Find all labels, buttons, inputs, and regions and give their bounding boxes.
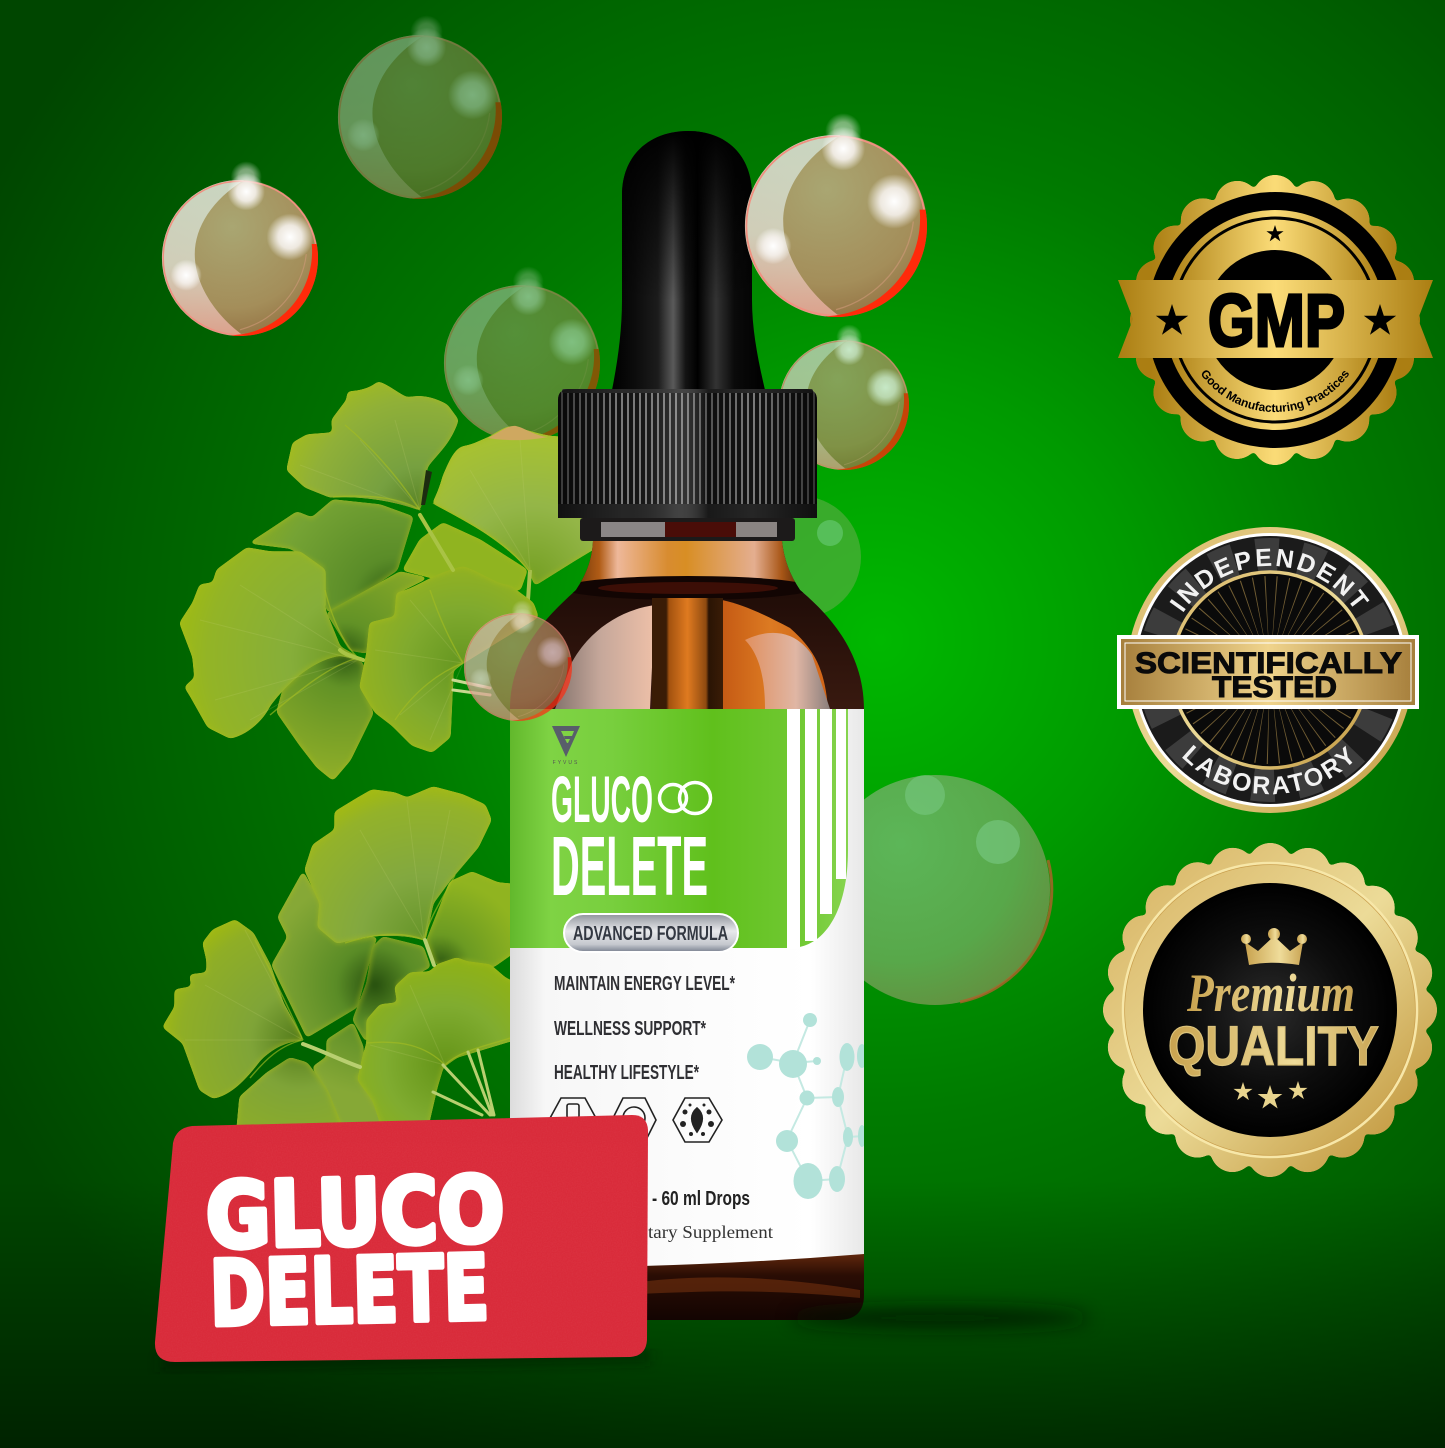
badge: GMP: Good Manufacturing Practices — [1202, 370, 1349, 412]
label molecule — [747, 1013, 867, 1199]
label stripes — [787, 709, 846, 949]
leaf edge ribs: upper cluster — [270, 425, 530, 720]
badge: premium quality — [1118, 858, 1422, 1162]
leaf: lower left — [163, 920, 303, 1098]
red card — [150, 1110, 655, 1372]
leaf: right — [433, 427, 600, 585]
leaf stem right — [528, 570, 530, 600]
bubble: small right — [779, 324, 909, 470]
arc text top — [1166, 566, 1374, 670]
leaf cluster: lower ginkgo — [163, 787, 520, 1130]
GMP ribbon stars — [1156, 304, 1188, 335]
GMP text: GMP — [1208, 279, 1345, 362]
bubble: large right green — [820, 775, 1052, 1005]
three stars — [1233, 1081, 1308, 1109]
badge: scientifically tested: LABORATORY — [1182, 744, 1352, 794]
label title — [552, 776, 712, 895]
advanced formula pill: ADVANCED FORMULA — [573, 923, 728, 945]
GMP top star — [1266, 225, 1284, 241]
leaf: front center — [360, 567, 538, 752]
product label — [510, 709, 867, 1268]
label benefits: MAINTAIN ENERGY LEVEL* — [554, 973, 735, 995]
card title: DELETE — [209, 1236, 490, 1347]
label logo: FYVUS — [553, 760, 579, 766]
banner text — [1135, 647, 1402, 704]
leaf: lower front — [358, 958, 520, 1130]
premium scalloped edge — [1118, 858, 1422, 1162]
leaf: big left — [180, 548, 363, 738]
leaf edge ribs: lower cluster — [250, 875, 510, 1078]
label benefits: WELLNESS SUPPORT* — [554, 1018, 706, 1040]
banner text: SCIENTIFICALLY — [1135, 647, 1402, 680]
leaf: top — [287, 382, 458, 510]
label benefits: HEALTHY LIFESTYLE* — [554, 1062, 699, 1084]
dropper bulb — [612, 131, 765, 390]
leaf: lower top — [305, 787, 491, 943]
ribbed cap — [558, 389, 817, 518]
badge: scientifically tested — [1117, 527, 1419, 813]
GMP arc text — [1183, 320, 1367, 412]
bottle — [500, 131, 880, 1322]
product label: DELETE — [551, 819, 708, 913]
dropper bulb top shade — [622, 131, 752, 300]
leaf stems: lower cluster — [303, 940, 494, 1115]
GMP ribbon — [1118, 280, 1433, 358]
leaf stems: upper cluster — [340, 515, 490, 695]
leaf: lower left back — [277, 655, 373, 780]
bottle ground shadow — [790, 1307, 1090, 1329]
leaf veins: upper cluster — [200, 420, 530, 740]
crown icon — [1241, 928, 1307, 965]
leaf: lower bottom mid — [313, 1023, 383, 1130]
banner text: TESTED — [1212, 671, 1337, 704]
card title: GLUCO — [205, 1158, 505, 1269]
bottle glass — [500, 540, 880, 1322]
card title — [205, 1158, 507, 1347]
leaf tip tan — [488, 426, 548, 440]
badge rays — [1212, 612, 1328, 728]
banner — [1117, 635, 1419, 709]
bubble: front of bottle — [464, 600, 572, 721]
label volume text: - 60 ml Drops — [652, 1188, 750, 1210]
leaf: lower bottom small — [237, 1058, 343, 1130]
leaf: back right — [403, 523, 527, 590]
bubble: left pink — [162, 161, 318, 336]
bubble: large top right — [745, 113, 927, 317]
neck collar — [580, 518, 795, 541]
leaf: back center — [250, 500, 413, 612]
quality text: QUALITY — [1168, 1014, 1379, 1077]
GMP scalloped edge — [1145, 190, 1405, 450]
leaf: lower back left — [272, 872, 377, 1037]
label title: GLUCO — [551, 762, 653, 836]
label logo — [552, 726, 580, 766]
leaf sliver dark — [421, 470, 432, 505]
leaf: lower right back — [427, 872, 520, 967]
advanced formula pill — [564, 914, 738, 952]
bubble: top faint — [338, 15, 502, 199]
bubble: center faint — [444, 266, 600, 441]
leaf: lower center strip — [353, 937, 430, 1043]
leaf cluster: upper ginkgo — [180, 382, 600, 780]
premium script: Premium — [1186, 963, 1355, 1023]
badge: GMP — [1118, 175, 1433, 465]
leaf: mid dark — [327, 572, 427, 653]
label benefits — [554, 973, 735, 1084]
leaf veins: lower cluster — [185, 800, 450, 1065]
label hex icons — [549, 1098, 722, 1142]
arc text bottom — [1146, 670, 1394, 794]
badge: scientifically tested: INDEPENDENT — [1170, 548, 1370, 612]
bubble: behind neck green — [739, 496, 861, 618]
card felt texture — [150, 1110, 655, 1368]
label supplement text: tary Supplement — [648, 1222, 773, 1242]
